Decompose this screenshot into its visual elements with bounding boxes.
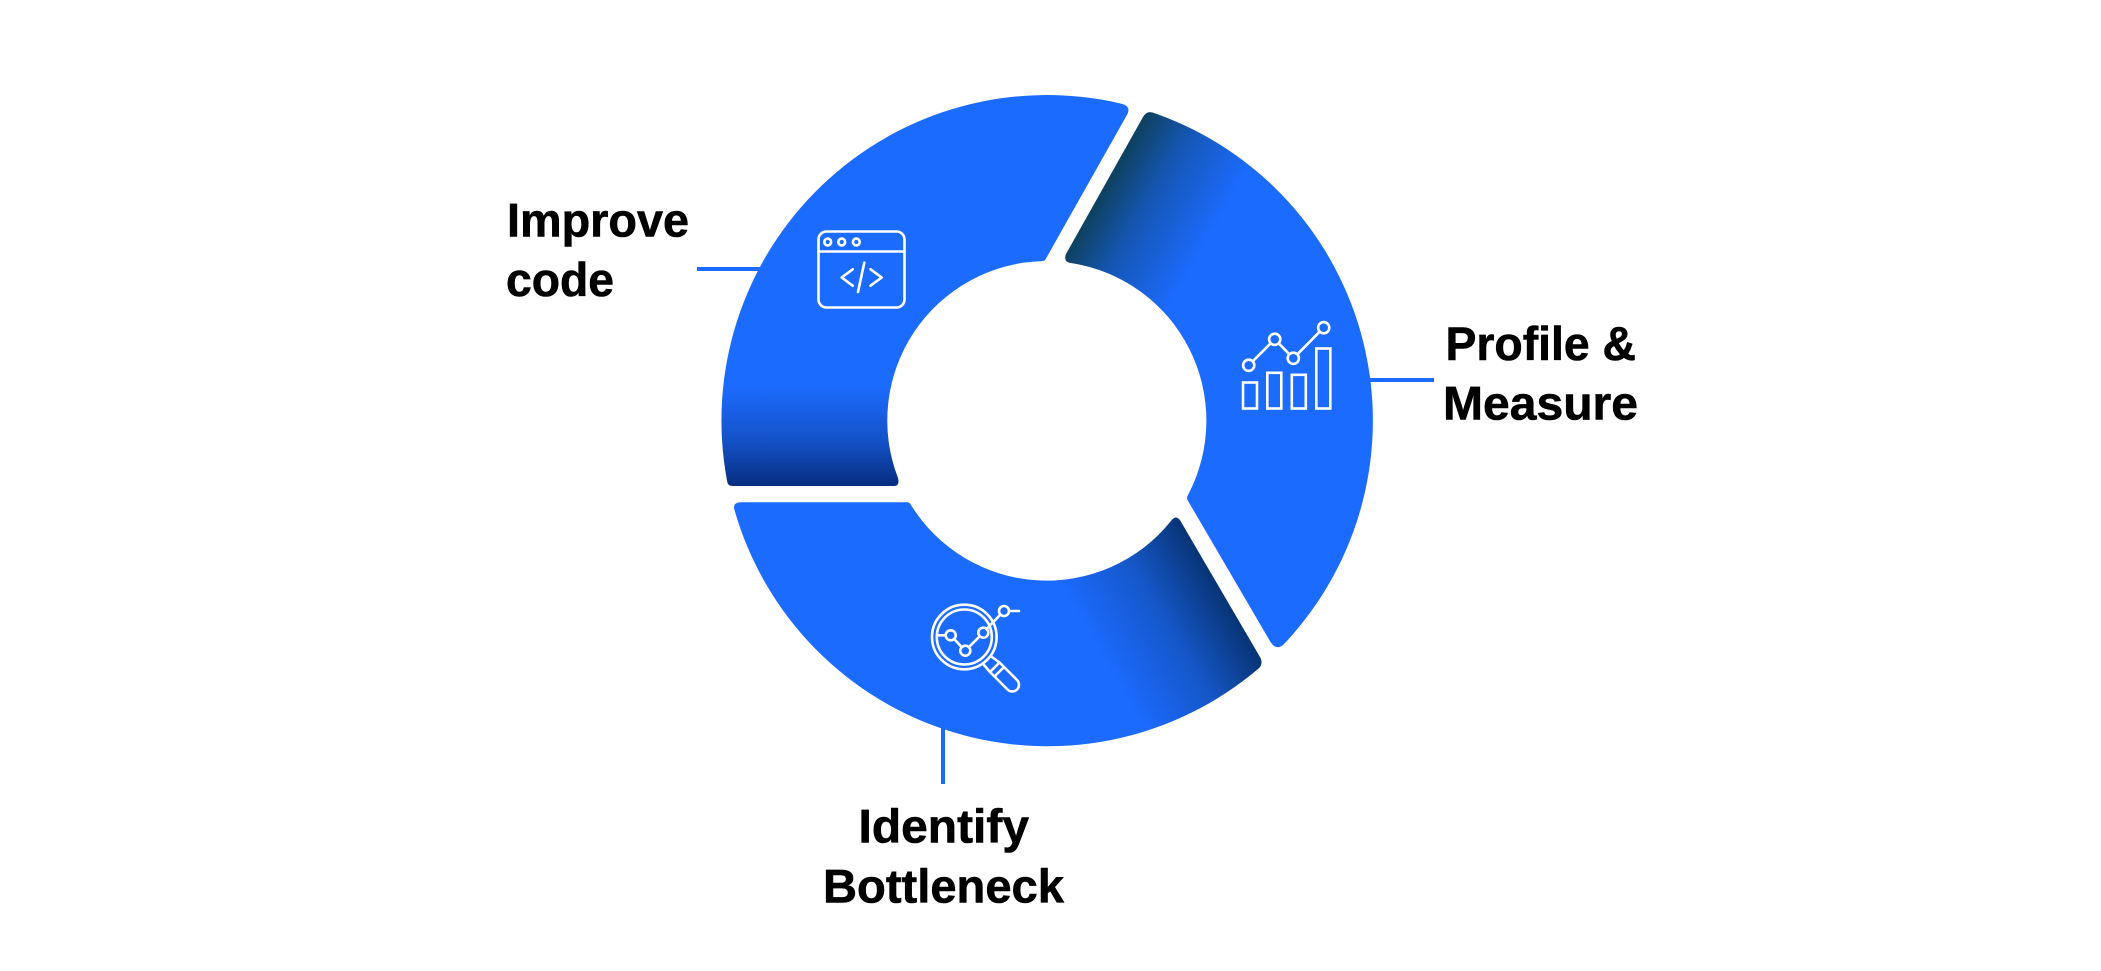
- connector: profile and measure: [1368, 378, 1434, 382]
- label: identify bottleneck: Identify: [858, 800, 1029, 853]
- connector: identify bottleneck: [941, 725, 945, 784]
- label: improve code: code: [506, 253, 614, 306]
- label: profile and measure: Profile &: [1446, 317, 1636, 370]
- label: improve code: [506, 194, 689, 306]
- icon: bar and line chart: [1243, 322, 1330, 408]
- label: improve code: Improve: [507, 194, 689, 247]
- label: profile and measure: Measure: [1443, 376, 1638, 430]
- segment: improve code: [721, 95, 1128, 486]
- segment: profile and measure: [1065, 112, 1373, 647]
- label: identify bottleneck: [823, 800, 1065, 913]
- connector: improve code: [697, 267, 767, 271]
- segment: identify bottleneck: [734, 502, 1262, 746]
- label: identify bottleneck: Bottleneck: [823, 860, 1065, 913]
- icon: code window: [818, 232, 904, 308]
- label: profile and measure: [1443, 317, 1638, 430]
- icon: magnifier with chart: [932, 605, 1019, 691]
